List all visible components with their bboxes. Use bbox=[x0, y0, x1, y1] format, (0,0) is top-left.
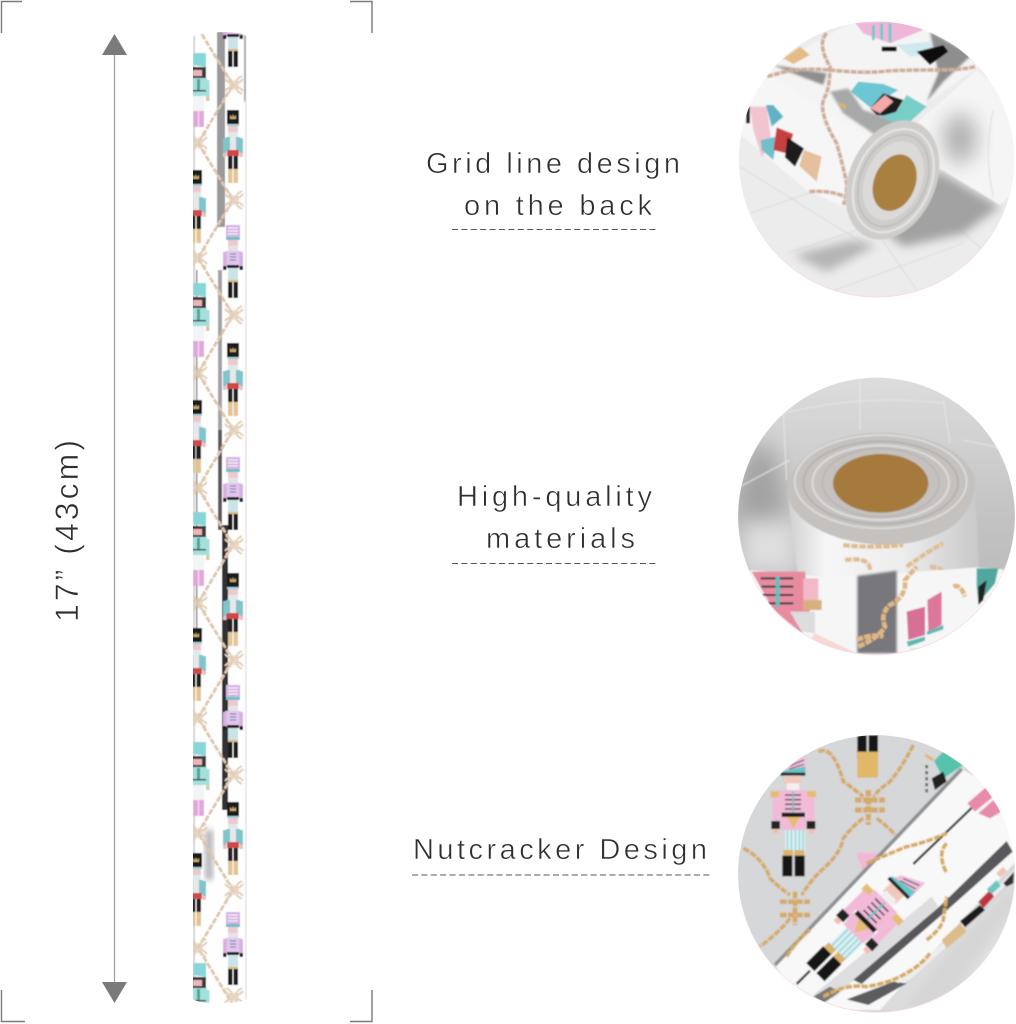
label: high-quality materials bbox=[452, 481, 656, 564]
lower roll bbox=[880, 877, 1016, 1010]
corner bracket: bottom left bbox=[2, 990, 25, 1022]
lattice pattern bbox=[189, 0, 243, 1006]
roll end rings bbox=[787, 432, 975, 545]
corner bracket: bottom right bbox=[350, 990, 372, 1022]
dimension label: 17” (43cm) bbox=[49, 440, 85, 622]
pink nutcracker detail bbox=[752, 572, 857, 653]
teal nutcracker on roll bbox=[837, 82, 927, 127]
gold lattice bbox=[743, 745, 913, 947]
label: grid line design: Grid line design bbox=[426, 148, 680, 180]
gold scrolls on foil bbox=[787, 833, 947, 997]
nutcracker figures, left column bbox=[193, 52, 210, 1003]
legs of upper figure bbox=[857, 735, 878, 778]
teal hat figure bbox=[925, 752, 963, 795]
pink hat fragment bbox=[856, 852, 878, 872]
photo circle: roll end, materials bbox=[738, 378, 1015, 656]
label: grid line design bbox=[426, 148, 680, 230]
grey band above dark bbox=[813, 897, 938, 998]
upright nutcracker bbox=[771, 755, 816, 876]
dark foil band bbox=[853, 841, 1013, 984]
first roll white band bbox=[775, 769, 1016, 1010]
left nutcracker on roll bbox=[746, 105, 822, 182]
far roll stripes bbox=[942, 923, 967, 948]
corner bracket: top left bbox=[2, 2, 22, 33]
foil reflection stripes bbox=[193, 32, 247, 1003]
gold scrolls lower bbox=[857, 567, 965, 647]
corner bracket: top right bbox=[350, 2, 372, 33]
photo circle: grid line back of roll bbox=[739, 22, 1014, 298]
foil rolls, drawn in crop coordinates bbox=[775, 769, 1016, 1010]
roll edge line bbox=[775, 769, 962, 965]
label: high-quality materials: High-quality bbox=[457, 481, 652, 513]
rotated large nutcracker bbox=[806, 874, 926, 982]
label: grid line design: on the back bbox=[464, 190, 652, 222]
scrolls on upper roll bbox=[842, 541, 945, 571]
label: nutcracker design: Nutcracker Design bbox=[413, 834, 707, 866]
nutcracker figures, right column bbox=[223, 0, 243, 985]
pink fragments upper right bbox=[967, 787, 1002, 818]
dimension arrow bbox=[102, 34, 127, 1003]
label: high-quality materials: materials bbox=[486, 523, 635, 555]
roll end with core bbox=[844, 120, 940, 240]
upper roll body bbox=[788, 500, 978, 578]
mirror foil lower section bbox=[750, 567, 1003, 657]
wrapping paper roll bbox=[193, 32, 247, 1003]
photo circle: nutcracker design bbox=[730, 725, 1016, 1024]
top nutcracker bbox=[783, 20, 948, 65]
gold scrolls bbox=[767, 33, 975, 205]
teal corner fragment bbox=[977, 568, 998, 603]
black rod bbox=[797, 797, 983, 984]
windows bbox=[907, 592, 943, 657]
